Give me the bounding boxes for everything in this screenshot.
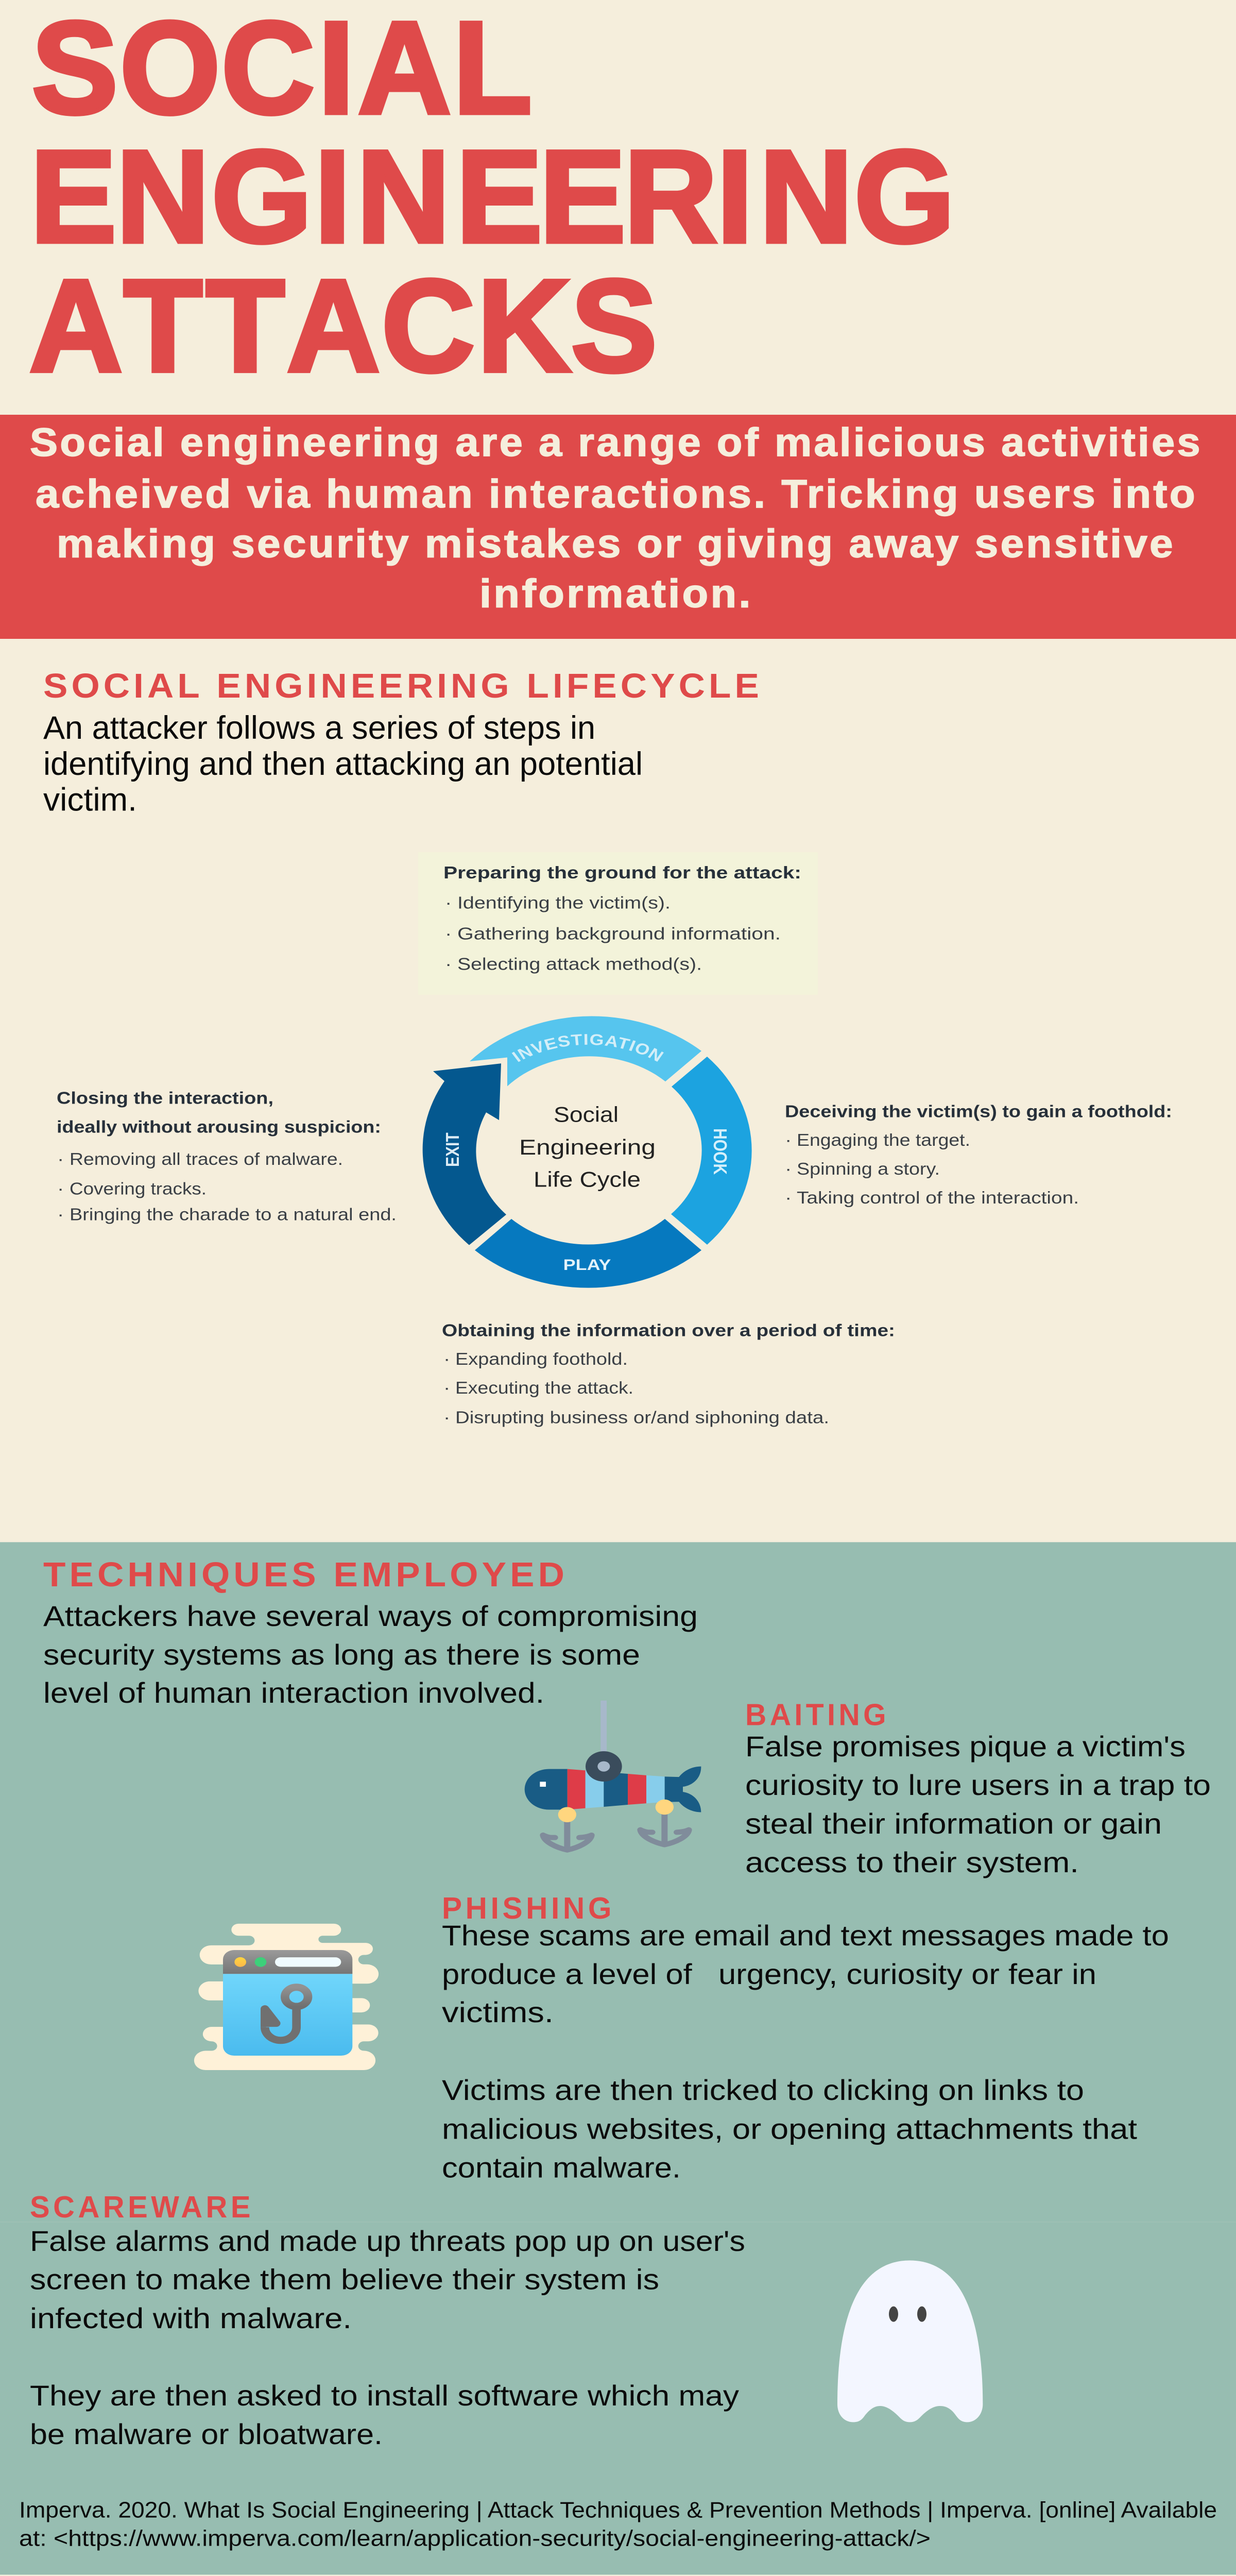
callout: exit steps: Removing all traces of malware.: [70, 1149, 343, 1168]
title: ENGINEERING: [30, 124, 955, 270]
technique: scareware: be malware or bloatware.: [30, 2418, 383, 2451]
technique: phishing: malicious websites, or opening attachments that: [442, 2113, 1137, 2145]
technique: phishing: contain malware.: [442, 2152, 681, 2184]
callout: exit steps: Bringing the charade to a natural end.: [70, 1205, 397, 1224]
callout: investigation steps: Selecting attack method(s).: [457, 955, 702, 974]
callout: hook steps: Taking control of the interaction.: [797, 1188, 1079, 1207]
callout: exit steps: ·: [57, 1179, 64, 1198]
callout: exit steps: Covering tracks.: [70, 1179, 207, 1198]
techniques description: Attackers have several ways of compromising: [43, 1600, 698, 1633]
technique: scareware: SCAREWARE: [30, 2190, 254, 2224]
callout: play steps: Executing the attack.: [455, 1378, 633, 1397]
icon: phishing browser window: [194, 1924, 379, 2070]
ring segment: investigation: [470, 1016, 701, 1086]
ring segment: hook: [671, 1057, 752, 1245]
lifecycle description: An attacker follows a series of steps in: [43, 709, 595, 746]
callout: investigation steps: Gathering background information.: [457, 924, 781, 943]
panel: techniques employed: [0, 1542, 1236, 2575]
callout: exit steps: ·: [57, 1149, 64, 1168]
technique: scareware: infected with malware.: [30, 2302, 352, 2335]
callout: play steps: ·: [443, 1378, 450, 1397]
lifecycle description: [43, 709, 643, 818]
heading: lifecycle: SOCIAL ENGINEERING LIFECYCLE: [43, 667, 763, 705]
heading: techniques: TECHNIQUES EMPLOYED: [43, 1555, 568, 1594]
callout: hook steps: ·: [785, 1130, 792, 1149]
callout: exit steps: ·: [57, 1205, 64, 1224]
technique: baiting: steal their information or gain: [745, 1808, 1162, 1840]
panel: social engineering lifecycle: [43, 667, 1172, 1427]
technique: phishing: [442, 1891, 1169, 2184]
intro text: [30, 420, 1203, 616]
callout: exit steps: ideally without arousing suspicion:: [57, 1117, 381, 1137]
title: ATTACKS: [29, 253, 657, 399]
panel: header: [0, 0, 1236, 415]
ring centre label: Life Cycle: [534, 1167, 641, 1191]
technique: baiting: [745, 1698, 1211, 1879]
technique: phishing: produce a level of urgency, curiosity or fear in: [442, 1958, 1096, 1991]
callout: play steps: [442, 1320, 895, 1427]
callout: play steps: Disrupting business or/and siphoning data.: [455, 1408, 829, 1427]
callout: hook steps: Spinning a story.: [797, 1159, 940, 1178]
technique: baiting: BAITING: [745, 1698, 889, 1732]
ring centre label: Social: [554, 1102, 619, 1127]
title: [29, 0, 955, 399]
technique: scareware: [30, 2190, 745, 2451]
ring segment: exit arrow: EXIT: [442, 1132, 464, 1167]
technique: baiting: False promises pique a victim's: [745, 1731, 1186, 1763]
ring segment: exit arrow: [423, 1063, 506, 1245]
callout: investigation steps: Preparing the ground for the attack:: [443, 863, 801, 882]
techniques description: level of human interaction involved.: [43, 1677, 544, 1709]
callout: investigation steps: ·: [445, 893, 452, 912]
techniques description: security systems as long as there is some: [43, 1639, 640, 1671]
callout: hook steps: Engaging the target.: [797, 1130, 970, 1149]
technique: baiting: access to their system.: [745, 1846, 1079, 1879]
technique: phishing: Victims are then tricked to clicking on links to: [442, 2074, 1084, 2107]
lifecycle ring diagram: [422, 1016, 752, 1288]
technique: phishing: These scams are email and text messages made to: [442, 1920, 1169, 1952]
lifecycle description: identifying and then attacking an potential: [43, 745, 643, 782]
callout: exit steps: [57, 1089, 397, 1224]
lifecycle description: victim.: [43, 781, 137, 818]
callout: play steps: Obtaining the information over a period of time:: [442, 1320, 895, 1340]
technique: scareware: False alarms and made up threats pop up on user's: [30, 2225, 745, 2258]
ring segment: investigation: INVESTIGATION: [512, 1034, 664, 1062]
technique: scareware: They are then asked to install software which may: [30, 2380, 739, 2412]
ring segment: hook: HOOK: [709, 1128, 730, 1175]
citation: [19, 2498, 1217, 2551]
icon: ghost: [837, 2260, 983, 2422]
ring segment: play: PLAY: [563, 1257, 611, 1274]
intro text: information.: [479, 571, 753, 616]
panel: introduction banner: [0, 415, 1236, 639]
callout: investigation steps: ·: [445, 955, 452, 974]
ring centre label: Engineering: [519, 1135, 656, 1159]
callout: exit steps: Closing the interaction,: [57, 1089, 273, 1108]
icon: fishing lure: [525, 1701, 701, 1850]
technique: scareware: screen to make them believe their system is: [30, 2264, 659, 2296]
ring segment: play: [475, 1219, 701, 1288]
citation: at: <https://www.imperva.com/learn/application-security/social-engineering-attack/>: [19, 2527, 931, 2551]
callout: hook steps: Deceiving the victim(s) to gain a foothold:: [785, 1101, 1172, 1121]
technique: baiting: curiosity to lure users in a trap to: [745, 1769, 1211, 1802]
callout: play steps: ·: [443, 1408, 450, 1427]
callout: play steps: Expanding foothold.: [455, 1349, 628, 1368]
ring centre label: [519, 1102, 656, 1191]
callout: investigation steps: ·: [445, 924, 452, 943]
technique: phishing: victims.: [442, 1996, 554, 2029]
callout: investigation steps: [418, 852, 818, 995]
callout: play steps: ·: [443, 1349, 450, 1368]
callout: hook steps: ·: [785, 1188, 792, 1207]
techniques description: [43, 1600, 698, 1709]
technique: phishing: PHISHING: [442, 1891, 615, 1925]
callout: hook steps: [785, 1101, 1172, 1207]
callout: investigation steps: Identifying the victim(s).: [457, 893, 671, 912]
callout: hook steps: ·: [785, 1159, 792, 1178]
